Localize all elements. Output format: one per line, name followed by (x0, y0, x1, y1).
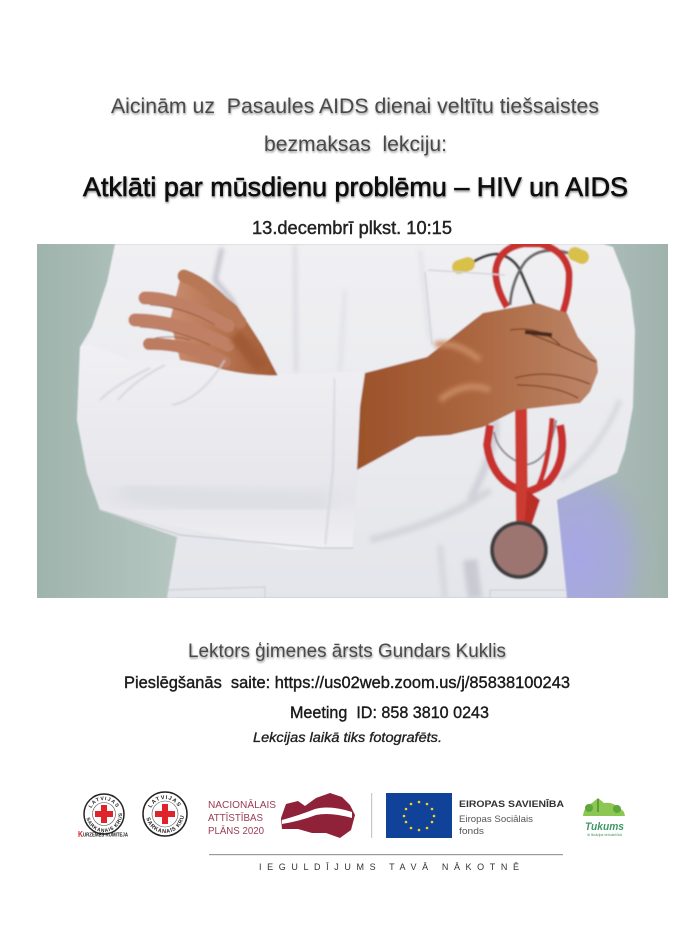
date and time: 13.decembrī plkst. 10:15 (252, 217, 452, 238)
stethoscope lower tubing (487, 405, 562, 579)
logo: National Development Plan 2020: PLĀNS 2020 (208, 825, 264, 837)
European Union text: Eiropas Sociālais (459, 814, 533, 825)
photography notice: Lekcijas laikā tiks fotografēts. (253, 730, 442, 745)
European Union text: EIROPAS SAVIENĪBA (459, 799, 564, 810)
logo: Red Cross Kurzeme committee: SARKANAIS KRUSTS (86, 813, 122, 832)
pocket lines (168, 587, 565, 598)
white coat body (77, 244, 635, 598)
meeting ID: Meeting ID: 858 3810 0243 (290, 703, 489, 722)
logo: National Development Plan 2020: NACIONĀLAIS (208, 799, 276, 811)
left hand (135, 272, 278, 376)
logo: Red Cross Kurzeme committee (78, 793, 128, 839)
European Union text (459, 799, 564, 837)
logo: Red Cross Kurzeme committee: URZEMES KOMITEJA (83, 832, 128, 838)
right hand and forearm (357, 303, 598, 470)
logo: European Union flag (386, 793, 452, 838)
title: Atklāti par mūsdienu problēmu – HIV un AIDS (83, 172, 628, 202)
logo: Tukums: Iki fiksācijas sirdsdarbībai (587, 833, 622, 837)
logo: Red Cross Kurzeme committee: LATVIJAS (88, 796, 119, 808)
logo: National Development Plan 2020: ATTĪSTĪBAS (208, 812, 263, 824)
stethoscope ear tubes and tips (459, 244, 582, 312)
logo: Red Cross Kurzeme committee: K (78, 830, 83, 839)
coat folds (215, 245, 620, 598)
rule above slogan (209, 854, 563, 855)
slogan: IEGULDĪJUMS TAVĀ NĀKOTNĒ (259, 862, 519, 872)
logo: National Development Plan 2020 (208, 793, 355, 838)
logo: Latvian Red Cross (142, 791, 188, 837)
lecturer: Lektors ģimenes ārsts Gundars Kuklis (188, 641, 506, 662)
invitation heading line 2: bezmaksas lekciju: (264, 133, 447, 156)
invitation heading line 1: Aicinām uz Pasaules AIDS dienai veltītu tiešsaistes (111, 95, 599, 118)
logo: Latvian Red Cross: LATVIJAS (148, 795, 181, 808)
logo: Tukums: Tukums (585, 821, 624, 833)
logo: Tukums (583, 798, 625, 837)
connection link: Pieslēgšanās saite: https://us02web.zoom.us/j/85838100243 (124, 673, 570, 692)
photo: doctor with stethoscope (37, 244, 668, 598)
European Union text: fonds (459, 826, 484, 837)
folded sleeve (222, 368, 352, 550)
divider between logos (371, 793, 372, 838)
logo: Latvian Red Cross: SARKANAIS KRUSTS (146, 816, 184, 834)
